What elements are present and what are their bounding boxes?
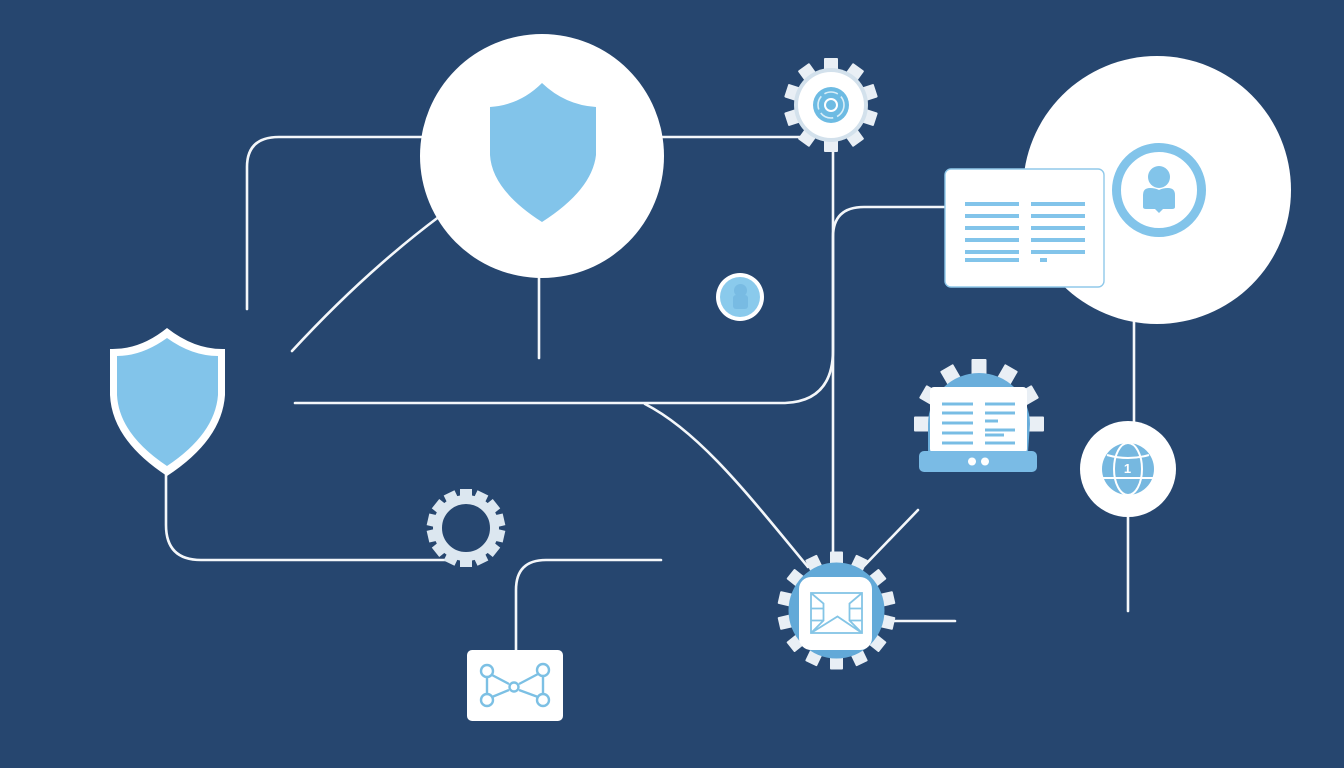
left shield [110,328,225,476]
top circle with shield [420,34,664,278]
user badge [1116,148,1202,232]
icon: globe: 1 [1124,461,1131,476]
document card [945,169,1104,287]
network card [467,650,563,721]
connector lines [166,137,1134,652]
ring gear [427,489,505,567]
icon: large shield [490,83,596,222]
icon: envelope [811,593,862,633]
top gear icon [784,58,878,152]
document gear icon [914,359,1044,472]
envelope gear icon [778,552,895,670]
small user dot [716,273,764,321]
right large circle [1023,56,1291,324]
globe circle [1080,421,1176,517]
